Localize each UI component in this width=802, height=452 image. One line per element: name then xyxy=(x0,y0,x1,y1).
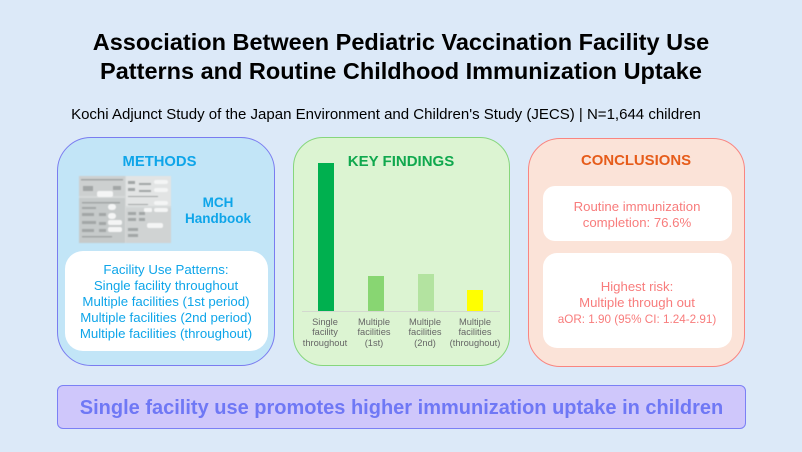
title: Patterns and Routine Childhood Immunization Uptake xyxy=(100,58,702,84)
label: multiple throughout xyxy=(450,316,500,348)
label: single facility: facility xyxy=(312,327,338,337)
label: multiple 1st: (1st) xyxy=(365,338,383,348)
banner: takeaway: Single facility use promotes higher immunization uptake in children xyxy=(80,397,723,419)
bar chart xyxy=(302,163,500,312)
label: single facility: throughout xyxy=(303,338,347,348)
bar: multiple 2nd xyxy=(418,274,434,310)
panel: methods xyxy=(57,137,275,366)
card: facility use patterns: Multiple facilities (2nd period) xyxy=(80,310,252,325)
title xyxy=(93,29,709,84)
label: single facility: Single xyxy=(312,316,338,326)
label: MCH handbook: MCH xyxy=(203,194,233,210)
card: facility use patterns: Multiple facilities (throughout) xyxy=(80,326,252,341)
label: multiple throughout: Multiple xyxy=(459,316,491,326)
bar: single facility xyxy=(318,163,334,310)
heading: conclusions: CONCLUSIONS xyxy=(581,152,691,168)
card: completion: completion: 76.6% xyxy=(583,215,691,230)
heading: methods: METHODS xyxy=(122,154,196,170)
axis xyxy=(302,310,500,312)
label: multiple 1st: Multiple xyxy=(358,316,390,326)
card: highest risk: Highest risk: xyxy=(601,278,673,294)
bar: multiple 1st xyxy=(368,276,384,310)
label: MCH handbook xyxy=(185,194,251,226)
label: multiple 2nd: (2nd) xyxy=(414,338,436,348)
banner: takeaway xyxy=(57,385,746,429)
heading: key findings: KEY FINDINGS xyxy=(348,152,454,170)
label: multiple throughout: facilities xyxy=(458,327,492,337)
card: facility use patterns: Facility Use Patterns: xyxy=(103,262,229,277)
panel: key findings xyxy=(293,137,510,366)
card: facility use patterns: Single facility throughout xyxy=(94,278,238,293)
label: single facility xyxy=(302,316,348,348)
title: Association Between Pediatric Vaccination Facility Use xyxy=(93,29,709,55)
subtitle: Kochi Adjunct Study of the Japan Environment and Children's Study (JECS) | N=1,644 children xyxy=(71,106,701,122)
card: completion xyxy=(542,186,732,241)
label: multiple 2nd: Multiple xyxy=(409,316,441,326)
card: facility use patterns xyxy=(64,251,268,351)
card: completion: Routine immunization xyxy=(574,199,700,214)
panel: conclusions xyxy=(528,138,745,367)
label: multiple 2nd: facilities xyxy=(408,327,442,337)
card: highest risk: aOR: 1.90 (95% CI: 1.24-2.91) xyxy=(558,312,716,326)
bar: multiple throughout xyxy=(467,290,483,310)
image: MCH handbook xyxy=(78,176,172,244)
card: highest risk: Multiple through out xyxy=(579,294,695,310)
card: facility use patterns: Multiple facilities (1st period) xyxy=(82,294,250,309)
label: MCH handbook: Handbook xyxy=(185,211,251,226)
label: multiple 1st xyxy=(357,316,391,348)
card: highest risk xyxy=(542,253,732,348)
label: multiple 1st: facilities xyxy=(357,327,391,337)
label: multiple 2nd xyxy=(408,316,442,348)
label: multiple throughout: (throughout) xyxy=(450,338,500,348)
